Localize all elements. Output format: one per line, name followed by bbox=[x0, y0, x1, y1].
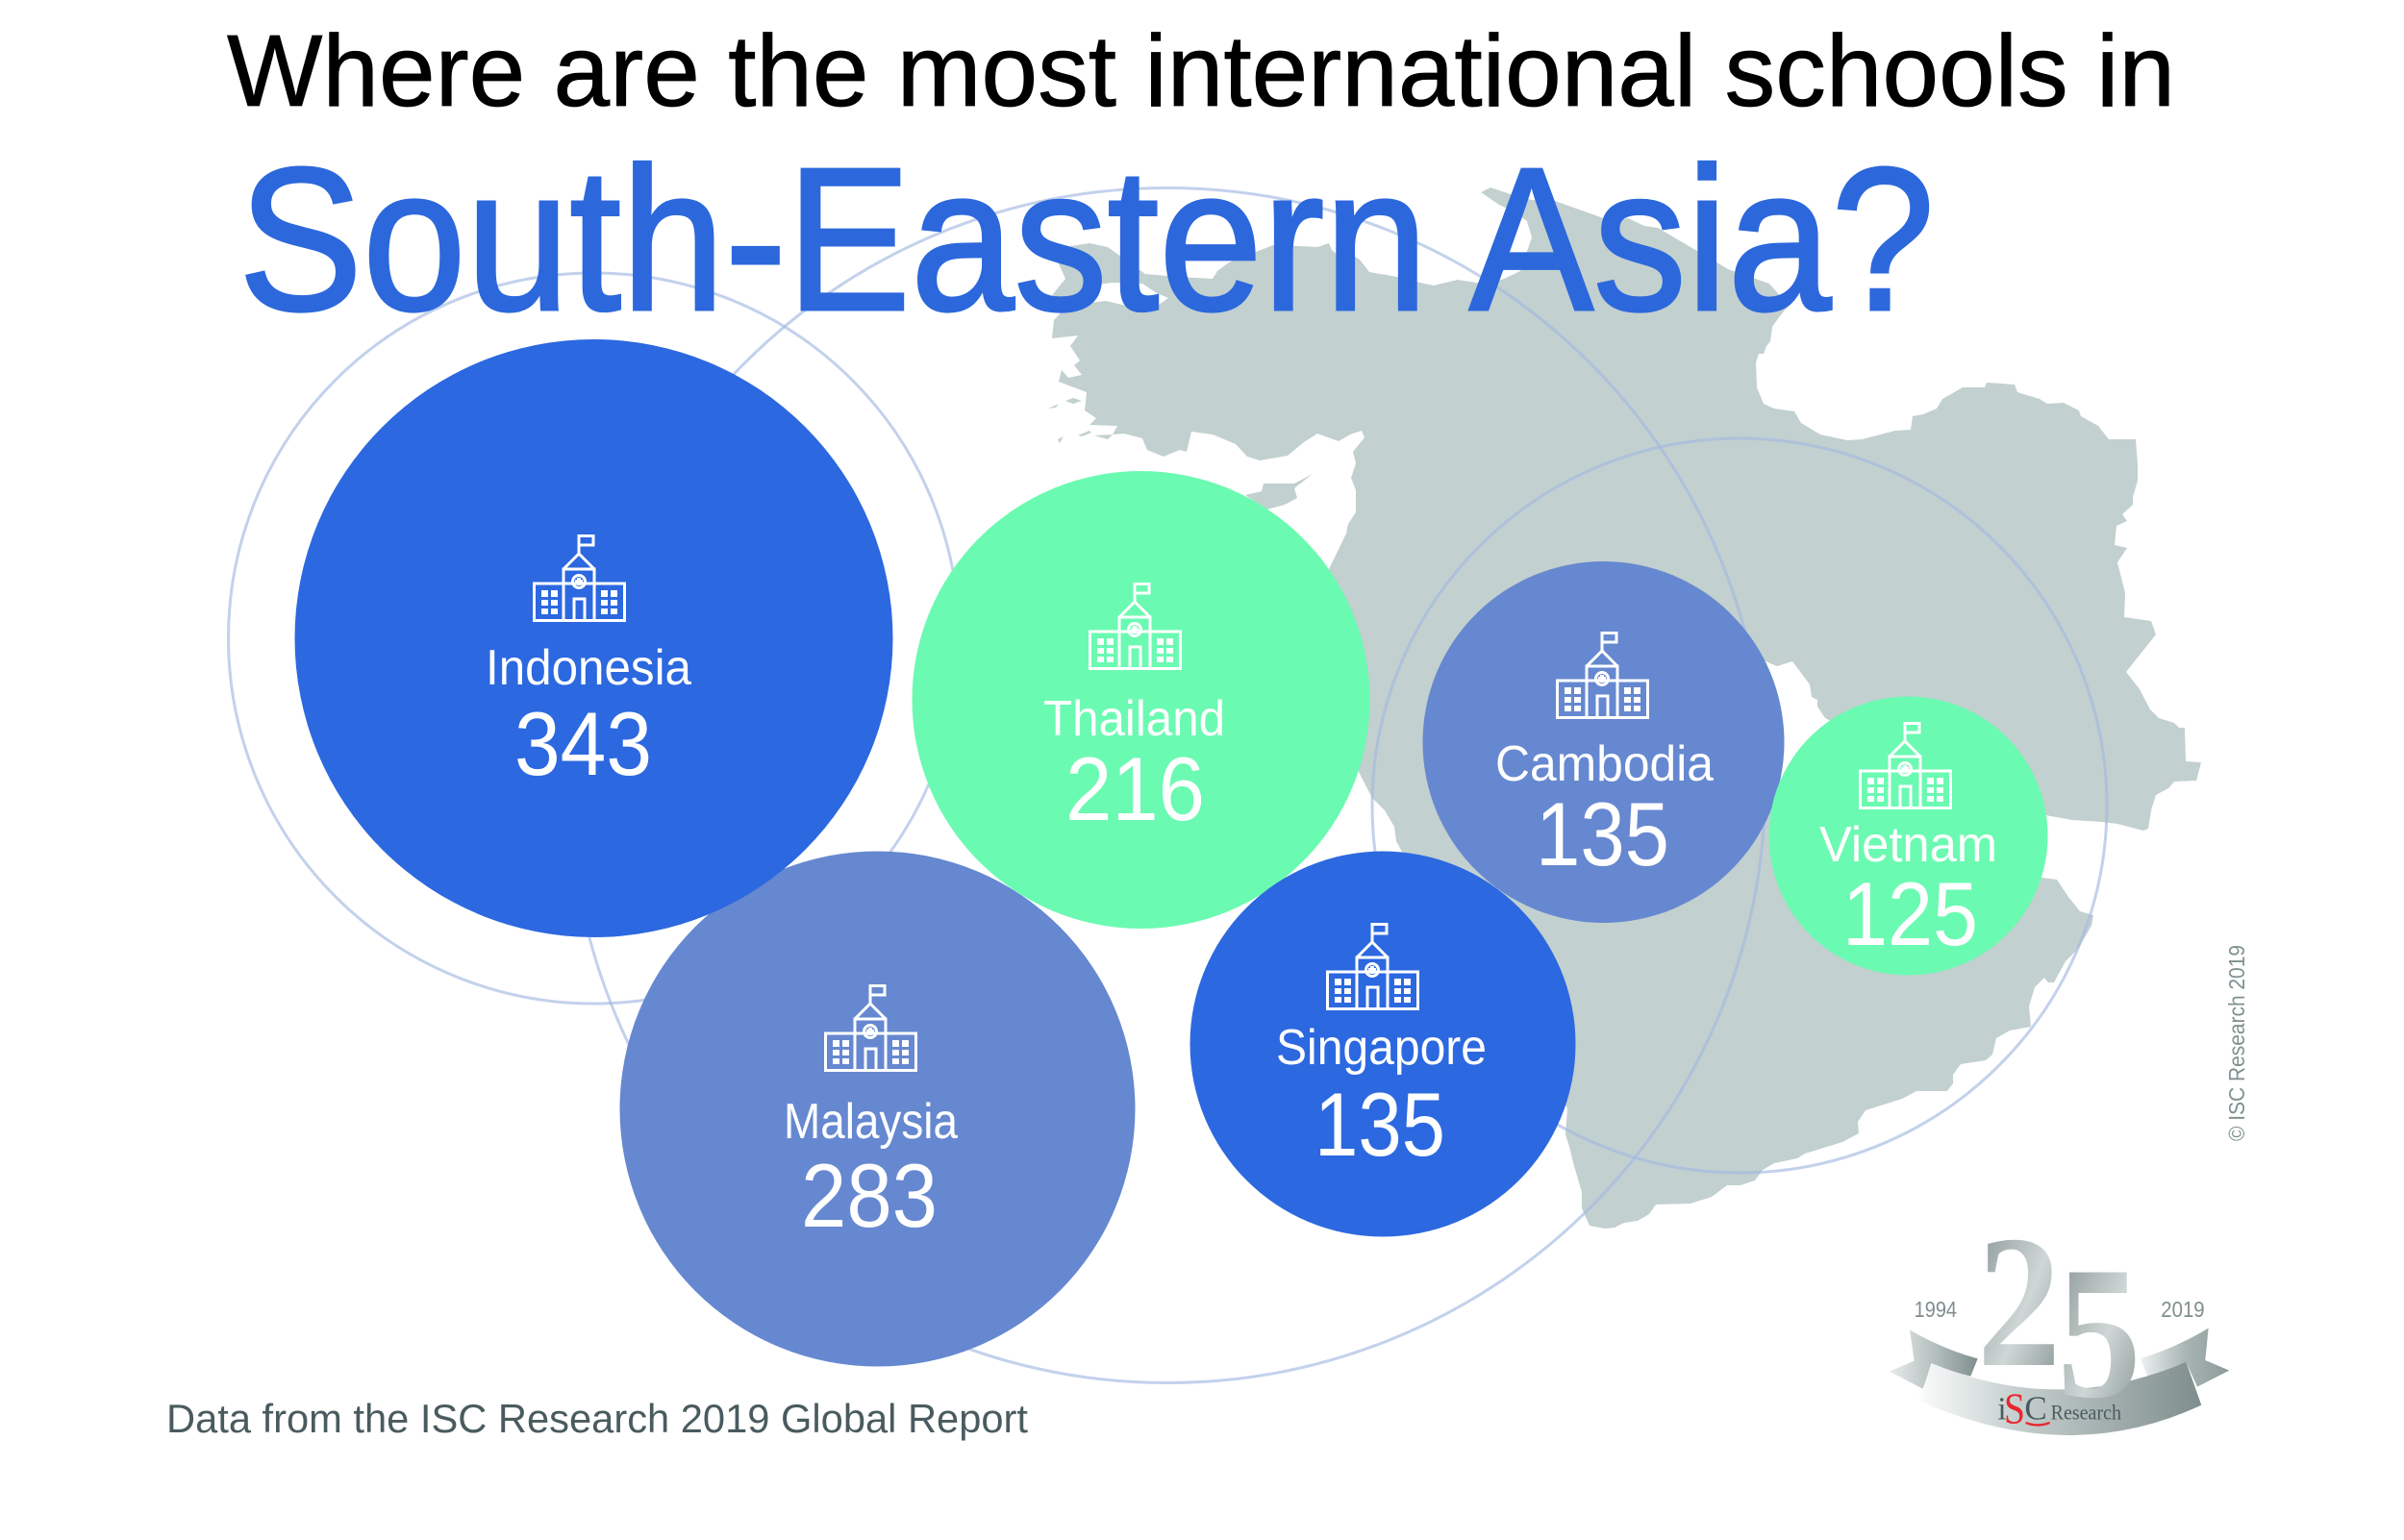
value: 135: 135 bbox=[1315, 1074, 1445, 1175]
bubble: Cambodia bbox=[1423, 561, 1785, 923]
map of South-East Asia bbox=[1048, 187, 2201, 1229]
label: Cambodia: Cambodia bbox=[1495, 736, 1714, 792]
icon: school bbox=[825, 986, 915, 1071]
icon: school bbox=[535, 536, 625, 621]
source note: Data from the ISC Research 2019 Global Report bbox=[166, 1396, 1028, 1441]
bubble: Malaysia bbox=[619, 852, 1135, 1367]
year 2019: 2019 bbox=[2161, 1297, 2205, 1322]
label: Indonesia: Indonesia bbox=[486, 640, 691, 696]
bubble: Singapore bbox=[1190, 852, 1575, 1236]
value: 283: 283 bbox=[801, 1145, 938, 1246]
title line 1: Where are the most international schools in bbox=[227, 14, 2175, 128]
icon: school bbox=[1860, 723, 1950, 808]
logo wordmark: C bbox=[2024, 1390, 2047, 1428]
bubble: Thailand bbox=[912, 471, 1369, 929]
outline circle: right ring bbox=[1372, 438, 2107, 1173]
title line 2: South-Eastern Asia? bbox=[238, 125, 1935, 353]
value: 125: 125 bbox=[1842, 863, 1978, 964]
logo: ISC Research 25 years bbox=[1890, 1197, 2229, 1437]
label: Singapore: Singapore bbox=[1276, 1020, 1487, 1076]
label: Malaysia: Malaysia bbox=[784, 1094, 958, 1150]
outline circle: around Indonesia bbox=[229, 273, 960, 1004]
numeral 25: 2 bbox=[1977, 1197, 2061, 1406]
icon: school bbox=[1558, 633, 1648, 718]
value: 135: 135 bbox=[1536, 783, 1669, 884]
ribbon tail left bbox=[1890, 1329, 1978, 1389]
outline circle: large regional ring bbox=[569, 188, 1765, 1382]
icon: school bbox=[1327, 925, 1417, 1009]
value: 216: 216 bbox=[1065, 738, 1205, 839]
label: Vietnam: Vietnam bbox=[1819, 817, 1997, 873]
numeral 25 bbox=[1977, 1197, 2141, 1437]
bubble: Vietnam bbox=[1769, 696, 2048, 975]
logo wordmark: S bbox=[2004, 1385, 2025, 1433]
numeral 25: 5 bbox=[2057, 1228, 2141, 1437]
logo wordmark: i bbox=[1997, 1392, 2007, 1428]
copyright note: © ISC Research 2019 bbox=[2224, 945, 2249, 1141]
year 1994: 1994 bbox=[1915, 1297, 1957, 1322]
ribbon band bbox=[1918, 1362, 2201, 1435]
logo wordmark bbox=[1997, 1385, 2122, 1433]
icon: school bbox=[1090, 584, 1181, 669]
logo wordmark: Research bbox=[2051, 1401, 2122, 1425]
ribbon tail right bbox=[2141, 1329, 2229, 1387]
bubble: Indonesia bbox=[294, 339, 892, 937]
label: Thailand: Thailand bbox=[1043, 691, 1225, 747]
value: 343: 343 bbox=[514, 693, 652, 794]
